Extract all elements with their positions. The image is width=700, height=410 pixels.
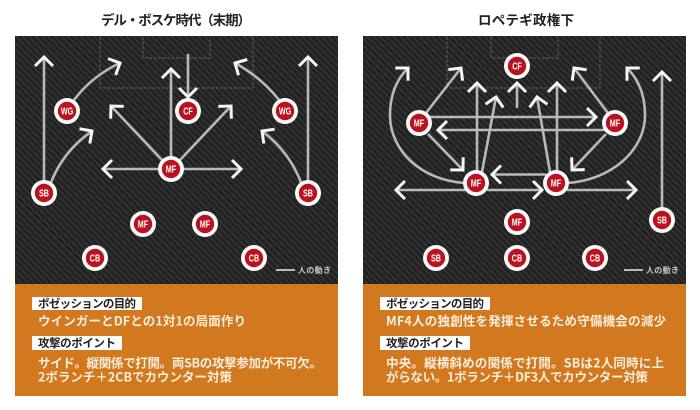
player: MF right bbox=[602, 110, 628, 136]
arrow: MF to upper right bbox=[180, 106, 231, 160]
player: MF left bbox=[406, 110, 432, 136]
player: MF anchor: MF bbox=[512, 216, 522, 228]
player: SB left: SB bbox=[39, 187, 49, 199]
arrow: MF to far right bbox=[567, 189, 636, 191]
arrow: left SB curve bbox=[50, 131, 92, 185]
text: attack point bbox=[386, 352, 664, 386]
text: attack point: 中央。縦横斜めの関係で打開。SBは2人同時に上 bbox=[386, 352, 664, 372]
player: CB left: CB bbox=[90, 252, 100, 264]
panel: right notes bbox=[363, 284, 686, 396]
text: attack point: 2ボランチ＋2CBでカウンター対策 bbox=[38, 366, 232, 386]
player: CB right bbox=[582, 245, 608, 271]
panel: left pitch bbox=[15, 36, 338, 284]
label: attack point: 攻撃のポイント bbox=[386, 336, 464, 350]
player: CF: CF bbox=[512, 60, 522, 72]
penalty area bbox=[100, 37, 253, 88]
player: WG left: WG bbox=[61, 105, 73, 117]
label: possession purpose: ポゼッションの目的 bbox=[38, 296, 136, 310]
player: SB left bbox=[31, 180, 57, 206]
left title: デル・ボスケ時代（末期） bbox=[101, 12, 251, 28]
arrow: SB forward run bbox=[661, 72, 663, 208]
player: MF right: MF bbox=[610, 117, 620, 129]
player: SB left bbox=[423, 245, 449, 271]
player: SB right bbox=[649, 207, 675, 233]
arrow: right WG cut inside bbox=[235, 63, 279, 100]
arrow: right MF inward bbox=[572, 134, 606, 170]
arrow: MF across to left bbox=[438, 129, 606, 131]
label: possession purpose: ポゼッションの目的 bbox=[386, 296, 484, 310]
player: WG left bbox=[54, 98, 80, 124]
player: MF top: MF bbox=[166, 163, 176, 175]
player: SB right: SB bbox=[303, 187, 313, 199]
player: CB left bbox=[82, 245, 108, 271]
player: MF left: MF bbox=[414, 117, 424, 129]
arrow: left MF wide curve bbox=[390, 68, 465, 183]
text: possession purpose: ウインガーとDFとの1対1の局面作り bbox=[38, 310, 246, 330]
player: MF centre left: MF bbox=[471, 177, 481, 189]
text: attack point: がらない。1ボランチ＋DF3人でカウンター対策 bbox=[386, 366, 648, 386]
player: CF bbox=[175, 98, 201, 124]
player: CF: CF bbox=[183, 105, 193, 117]
player: SB right: SB bbox=[657, 214, 667, 226]
label: attack point: 攻撃のポイント bbox=[38, 336, 116, 350]
panel: left notes bbox=[15, 284, 338, 396]
arrow: left MF diagonal forward bbox=[426, 68, 461, 113]
arrow: central MF left forward bbox=[476, 83, 478, 172]
legend: 人の動き bbox=[298, 265, 331, 275]
arrow: MF to far left bbox=[396, 189, 466, 191]
arrow: central pass left bbox=[492, 173, 546, 176]
arrow: right SB curve bbox=[262, 131, 302, 185]
arrow: left WG cut inside bbox=[74, 63, 120, 100]
player: CB right: CB bbox=[590, 252, 600, 264]
arrow: slanted right bbox=[537, 97, 550, 172]
text: attack point: サイド。縦関係で打開。両SBの攻撃参加が不可欠。 bbox=[38, 352, 322, 372]
player: MF top bbox=[158, 156, 184, 182]
legend: 人の動き bbox=[646, 265, 679, 275]
arrow: MF to right bbox=[182, 168, 241, 170]
player: CF bbox=[504, 53, 530, 79]
player: SB left: SB bbox=[431, 252, 441, 264]
arrow: left SB forward run bbox=[43, 57, 45, 183]
player: SB right bbox=[295, 180, 321, 206]
arrow: MF to MF right bbox=[487, 189, 542, 191]
player: CB centre: CB bbox=[512, 252, 522, 264]
player: CB right: CB bbox=[249, 252, 259, 264]
arrow: right MF wide curve bbox=[567, 68, 645, 183]
arrow: left MF inward bbox=[428, 134, 463, 170]
arrow: right MF diagonal forward bbox=[574, 68, 608, 113]
text: possession purpose: MF4人の独創性を発揮させるため守備機会の減少 bbox=[386, 310, 666, 330]
player: WG right: WG bbox=[279, 105, 291, 117]
player: WG right bbox=[272, 98, 298, 124]
player: MF lower left: MF bbox=[138, 218, 148, 230]
player: MF anchor bbox=[504, 209, 530, 235]
legend bbox=[624, 265, 679, 275]
arrow: CF drop bbox=[187, 54, 189, 97]
arrow: MF to left bbox=[103, 168, 160, 170]
panel: right pitch bbox=[363, 36, 686, 284]
arrow: short to CF bbox=[516, 83, 518, 108]
arrow: right SB forward run bbox=[307, 57, 309, 183]
player: MF centre right bbox=[543, 170, 569, 196]
text: attack point bbox=[38, 352, 322, 386]
player: MF centre right: MF bbox=[551, 177, 561, 189]
player: MF lower left bbox=[130, 211, 156, 237]
player: MF lower right bbox=[192, 211, 218, 237]
arrow: MF forward bbox=[170, 69, 172, 160]
player: MF centre left bbox=[463, 170, 489, 196]
legend bbox=[276, 265, 331, 275]
player: MF lower right: MF bbox=[200, 218, 210, 230]
arrow: MF across to right bbox=[429, 116, 596, 118]
arrow: MF to upper left bbox=[111, 106, 162, 160]
player: CB right bbox=[241, 245, 267, 271]
player: CB centre bbox=[504, 245, 530, 271]
arrow: slanted left bbox=[482, 97, 496, 172]
penalty area bbox=[447, 37, 600, 88]
arrow: central MF right forward bbox=[556, 83, 558, 172]
right title: ロペテギ政権下 bbox=[478, 12, 574, 28]
